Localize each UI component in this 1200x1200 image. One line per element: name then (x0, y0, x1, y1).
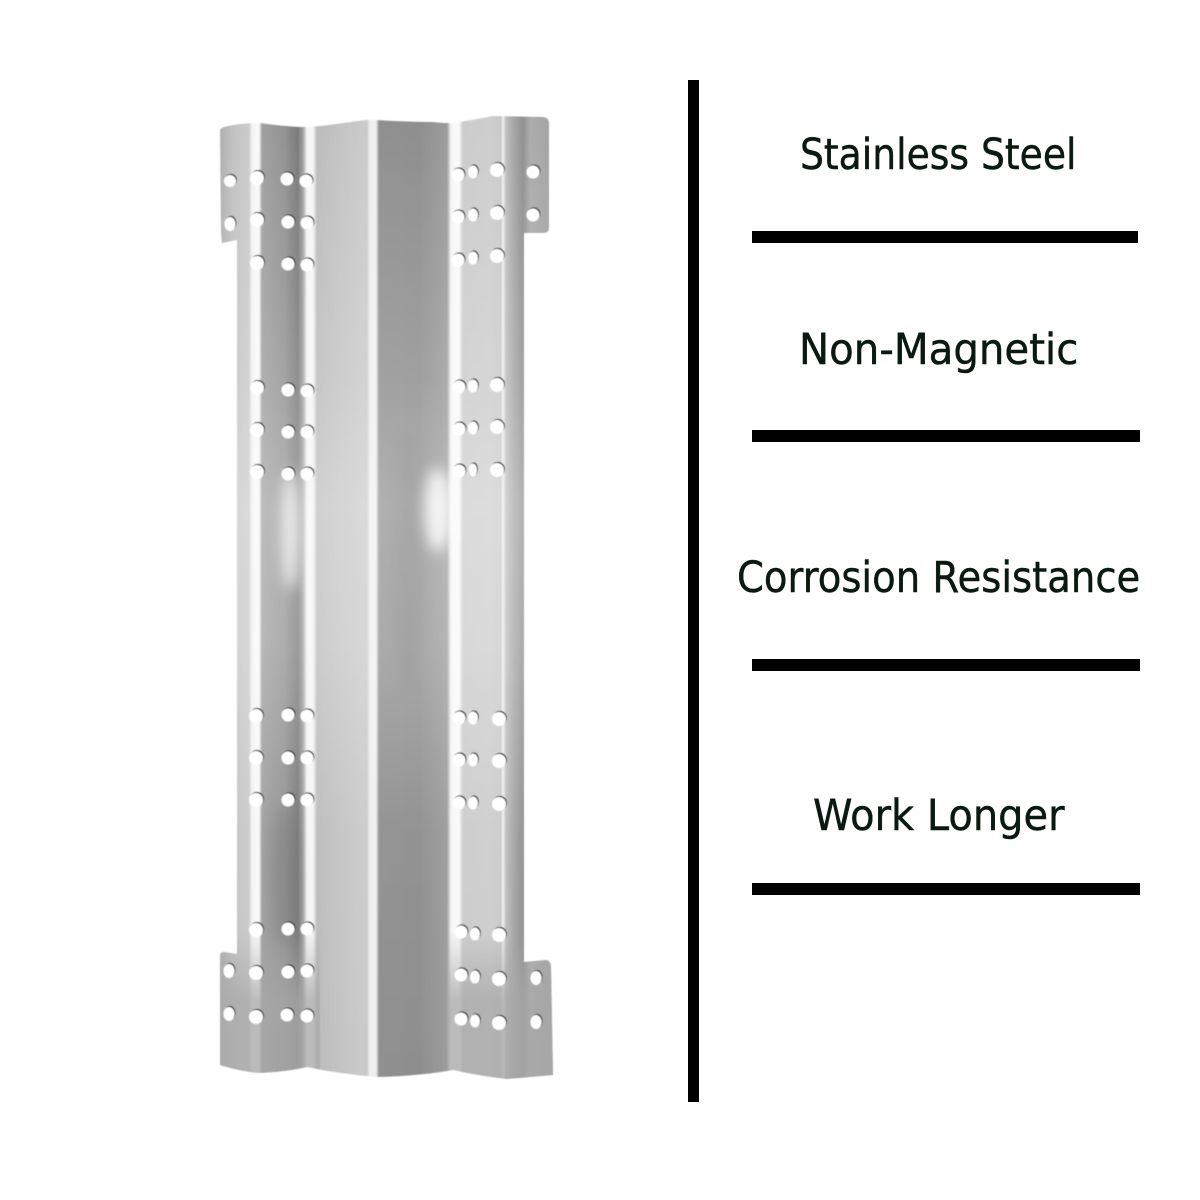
rule 3 (752, 659, 1140, 671)
label: Corrosion Resistance: Corrosion Resistance (737, 553, 1140, 603)
illustration: stainless steel heat plate (220, 116, 554, 1080)
rule 1 (752, 231, 1138, 243)
label: Non-Magnetic: Non-Magnetic (799, 325, 1078, 375)
label: Stainless Steel: Stainless Steel (800, 130, 1076, 180)
rule 2 (752, 430, 1140, 442)
label: Work Longer: Work Longer (813, 791, 1065, 841)
rule 4 (752, 883, 1140, 895)
vertical divider (688, 80, 699, 1102)
